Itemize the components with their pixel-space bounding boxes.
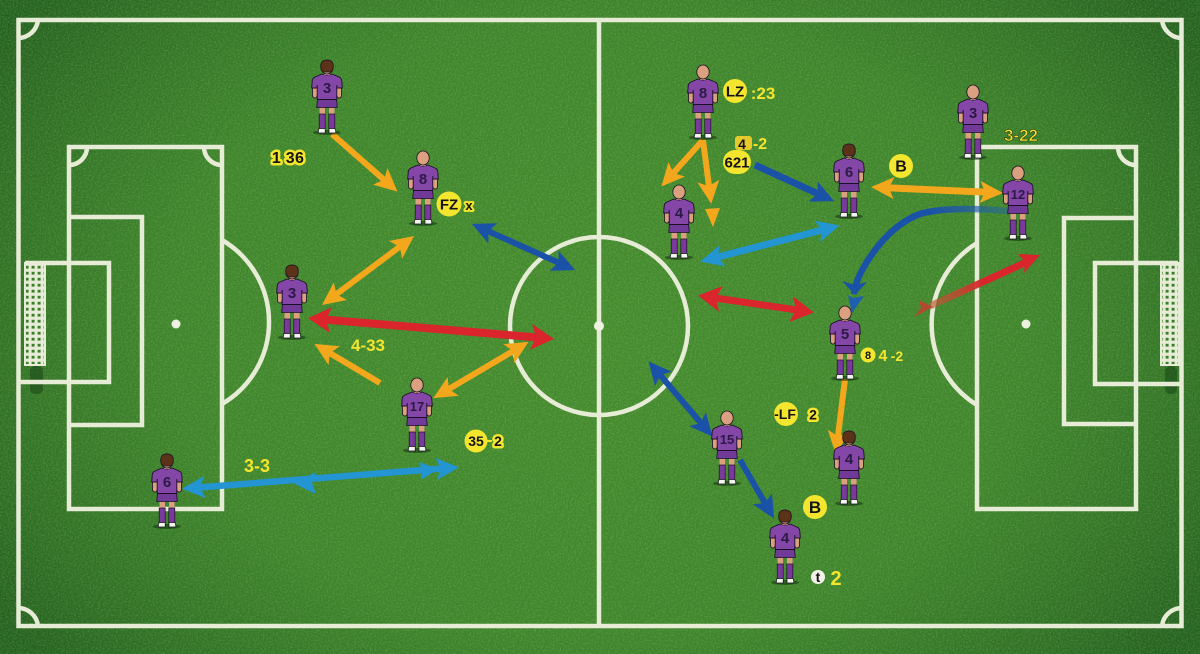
orange arrow to player 5 [332, 134, 390, 185]
player 8 left: 8 [419, 171, 427, 188]
red double arrow [318, 319, 544, 338]
label: 8 4-2: 8 [865, 350, 871, 362]
label: t 2: t [816, 569, 821, 585]
label: LZ 23 [723, 79, 775, 103]
player 4 upper right [664, 185, 694, 260]
label: LZ 23: LZ [726, 84, 744, 100]
player 6 right [834, 144, 864, 219]
player 6 left: 6 [163, 474, 171, 491]
dark blue double arrow [481, 228, 566, 266]
orange arrow to player 4 [837, 379, 845, 444]
label: FZ x [436, 192, 473, 216]
left half arrows [192, 134, 566, 494]
player 15 right: 15 [720, 432, 734, 447]
orange double arrow [881, 188, 993, 192]
label: B [889, 154, 913, 178]
orange detached arrowhead [705, 208, 720, 227]
label: FZ x: x [465, 198, 473, 213]
goal net right [1161, 263, 1179, 365]
label: B bottom: B [809, 498, 821, 517]
orange double arrow [330, 242, 406, 299]
player 15 right [712, 411, 742, 486]
label: B bottom [803, 495, 827, 519]
label: 35-2 [464, 430, 502, 452]
light blue double arrow [710, 228, 830, 259]
label: 4-33: 4-33 [351, 336, 385, 355]
curved dark blue arrow [842, 209, 1008, 313]
orange arrow down [703, 140, 710, 194]
red fading arrow [914, 254, 1040, 317]
dark blue arrow to player 4 [740, 460, 769, 510]
player 5 right [830, 306, 860, 381]
player 3 left [277, 265, 307, 340]
player 8 left [408, 151, 438, 226]
label: LF 2: -LF [774, 406, 796, 422]
label: 8 4-2: -2 [891, 348, 903, 364]
player 12 right [1003, 166, 1033, 241]
label: 1 36: 1 36 [272, 150, 304, 167]
orange double arrow near centre circle [442, 347, 520, 393]
orange arrow toward player 3 [323, 349, 380, 383]
label: 4-2 and 621 [723, 136, 767, 174]
label: 3-22: 3-22 [1004, 126, 1038, 145]
player 17 left: 17 [410, 399, 424, 414]
player 4 upper right: 4 [675, 205, 684, 222]
label: 4-2 and 621: 621 [724, 154, 750, 172]
light blue long arrow [192, 462, 449, 494]
player 3 right [958, 85, 988, 160]
label: 3-3: 3-3 [244, 456, 270, 476]
label: FZ x: FZ [440, 196, 458, 214]
player 4 bottom [770, 510, 800, 585]
label: 4-2 and 621: 4 [738, 136, 746, 152]
player 17 left [402, 378, 432, 453]
player 6 left [152, 454, 182, 529]
label: 4-2 and 621: -2 [753, 136, 767, 153]
dark blue arrow to player 6 [755, 165, 825, 197]
label: LF 2 [774, 402, 817, 426]
player 8 right [688, 65, 718, 140]
label: LF 2: 2 [809, 406, 817, 422]
player 4 lower right: 4 [845, 451, 854, 468]
player 4 bottom: 4 [781, 530, 790, 547]
goal shadows [30, 366, 1177, 394]
label: 35-2: 35 [468, 433, 484, 449]
label: 35-2: 2 [494, 433, 502, 449]
player 4 lower right [834, 431, 864, 506]
player 8 right: 8 [699, 85, 707, 102]
player 5 right: 5 [841, 326, 849, 343]
label: 8 4-2: 4 [879, 348, 888, 365]
player 3 right: 3 [969, 105, 977, 122]
label: t 2: 2 [830, 568, 842, 590]
orange arrow down-left [668, 140, 703, 179]
red double arrow [708, 297, 804, 311]
label: 8 4-2 [860, 348, 903, 365]
label: LZ 23: :23 [751, 84, 775, 103]
player 3 top left: 3 [323, 80, 331, 97]
player 6 right: 6 [845, 164, 853, 181]
goal net left [25, 263, 45, 365]
player 3 top left [312, 60, 342, 135]
player 12 right: 12 [1011, 187, 1025, 202]
label: B: B [895, 158, 907, 176]
player 3 left: 3 [288, 285, 296, 302]
label: t 2 [811, 568, 842, 590]
right half arrows [655, 140, 1040, 510]
dark blue double arrow [655, 369, 706, 429]
